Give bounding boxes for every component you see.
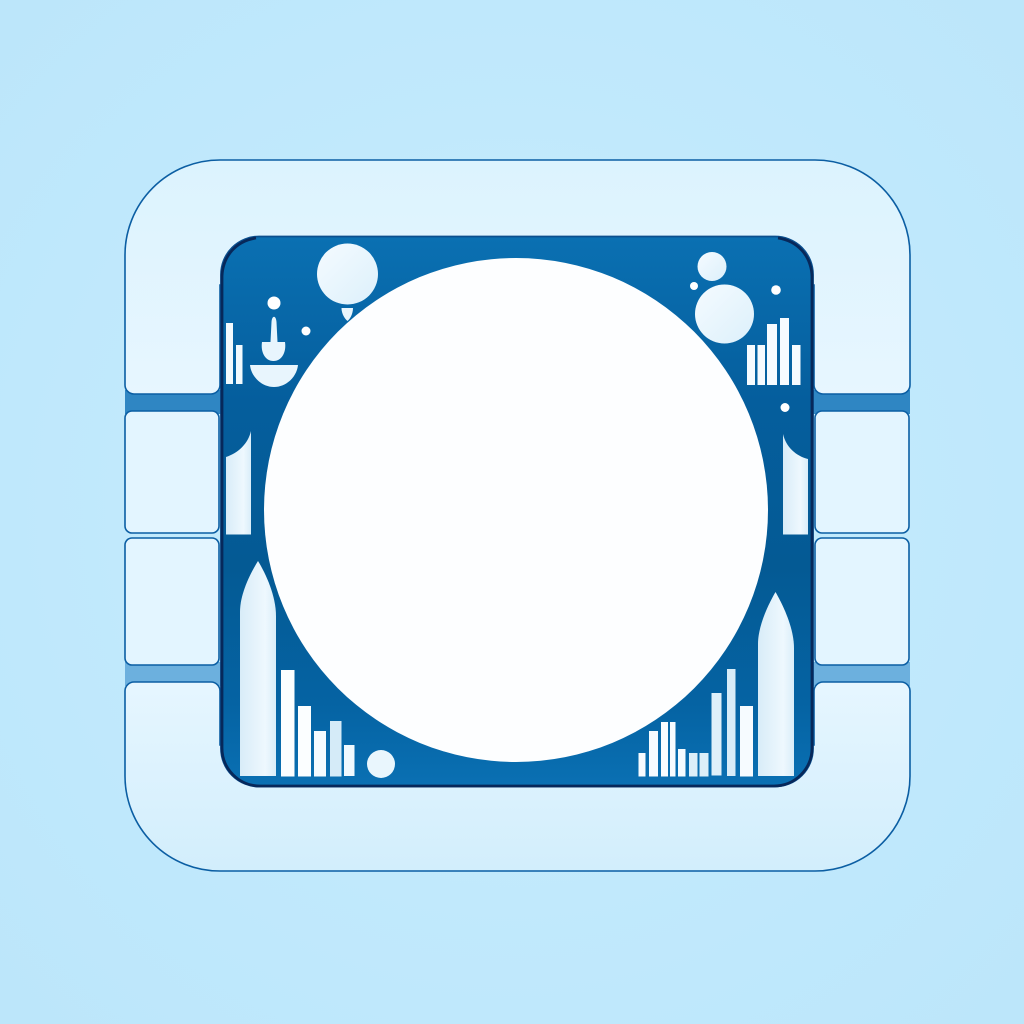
icon: medium bubble	[698, 252, 726, 281]
icon: bowl	[250, 365, 298, 387]
side cell: right lower	[815, 538, 909, 665]
top-left icons	[226, 244, 378, 387]
frame segment: top	[125, 160, 910, 394]
side cell: left lower	[125, 538, 219, 665]
rocket: right	[758, 592, 794, 776]
bar chart: bottom left	[281, 670, 354, 776]
side cell: right upper	[815, 411, 909, 533]
central white circle	[264, 258, 768, 762]
icon: dot	[268, 296, 280, 310]
icon: dot	[780, 403, 790, 412]
top-right icons	[690, 252, 800, 412]
icon: dot	[690, 282, 698, 290]
icon: small drop	[342, 308, 353, 321]
connector bar: upper left	[125, 390, 221, 414]
central blue panel	[221, 236, 813, 786]
side tower: right	[783, 434, 808, 534]
outer frame	[125, 160, 910, 871]
connector bar: lower right	[812, 662, 910, 686]
icon: large bubble	[695, 284, 754, 344]
icon: dot	[302, 326, 310, 336]
side cell: left upper	[125, 411, 219, 533]
rocket: left	[240, 561, 276, 776]
connector bar: lower left	[125, 662, 221, 686]
icon: spoon	[262, 317, 285, 361]
bar chart: top left	[226, 323, 242, 384]
connector bar: upper right	[812, 390, 910, 414]
icon: large bubble	[317, 244, 378, 304]
frame segment: bottom	[125, 682, 910, 871]
icon: dot	[771, 285, 781, 295]
side tower: left	[226, 431, 251, 534]
bar chart: top right	[747, 318, 800, 385]
bar chart: bottom right	[638, 669, 753, 776]
icon: bottom bubble	[367, 750, 395, 778]
